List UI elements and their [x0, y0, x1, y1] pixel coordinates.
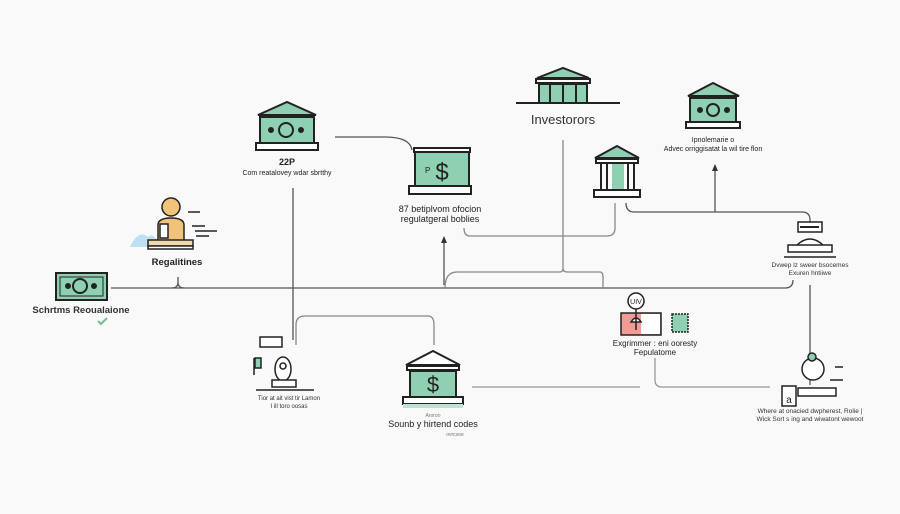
text: right desk label: [772, 262, 849, 277]
text: bank top left label: 22P: [279, 157, 295, 167]
text: bank top right label: Advec orriggisatat la wil tire flon: [664, 146, 762, 153]
text: bottom left label: I ill toro oosas: [270, 404, 308, 410]
text: bank top left label: Com reatalovey wdar sbrtthy: [242, 170, 332, 177]
text: bottom left label: [258, 396, 320, 410]
text: bank dollar label: 87 betiplvom ofocion: [399, 204, 481, 214]
icon: bottom bank: [403, 351, 463, 408]
icon: cash: [56, 273, 107, 300]
icon: bank dollar: $: [435, 159, 449, 186]
text: bottom left label: Tior at ait vist tir Lamon: [258, 396, 320, 402]
text: UIV label: [613, 339, 697, 357]
text: cash label: Schrtms Reoualaione: [32, 305, 130, 316]
icon: bottom bank: $: [427, 372, 439, 397]
arrowheads: [441, 164, 718, 243]
icon: person at desk: [130, 198, 217, 249]
connector lines: [111, 137, 810, 387]
text: investors: Investorors: [531, 112, 596, 127]
text: bottom bank label: [388, 413, 478, 438]
text: bank dollar label: [399, 204, 481, 224]
text: right desk label: Exuren hntiiwe: [789, 270, 832, 277]
text: bank dollar label: regulatgeral boblies: [401, 214, 480, 224]
text: UIV label: Exgrimmer : eni ooresty: [613, 339, 697, 348]
icon: bank dollar: [409, 148, 471, 194]
text: regalitines: Regalitines: [152, 257, 202, 268]
text: bank top right label: Ipnolemarie o: [692, 137, 734, 144]
icon: bank top left: [256, 102, 318, 150]
text: bank top right label: [664, 137, 762, 153]
icon: bank dollar: P: [425, 166, 430, 175]
text: bank top left label: [242, 157, 332, 177]
text: bottom bank label: Sounb y hirtend codes: [388, 419, 478, 429]
text: bottom right label: [757, 408, 864, 423]
icon: bottom left desk: [254, 337, 314, 390]
icon: UIV: UIV: [630, 299, 642, 306]
text: right desk label: Dvwep lz sweer bsocemes: [772, 262, 849, 269]
icon: right desk: [784, 222, 836, 257]
icon: UIV: [621, 293, 688, 335]
text: bottom right label: Wick Sort s ing and wiwatont wewoot: [757, 416, 864, 423]
icon: columns bank: [594, 146, 640, 197]
icon: bottom right: a: [786, 395, 792, 406]
text: bottom bank label: Aroroo: [425, 413, 441, 419]
text: cash label: [32, 305, 130, 324]
text: bottom bank label: ovrcsoe: [446, 432, 464, 438]
icon: bank top right: [686, 83, 740, 128]
text: bottom right label: Where at onacied dwpherest, Rolie |: [758, 408, 863, 415]
icon: bottom right: [782, 353, 843, 406]
text: UIV label: Fepulatome: [634, 348, 677, 357]
icon: investors bank: [516, 68, 620, 103]
